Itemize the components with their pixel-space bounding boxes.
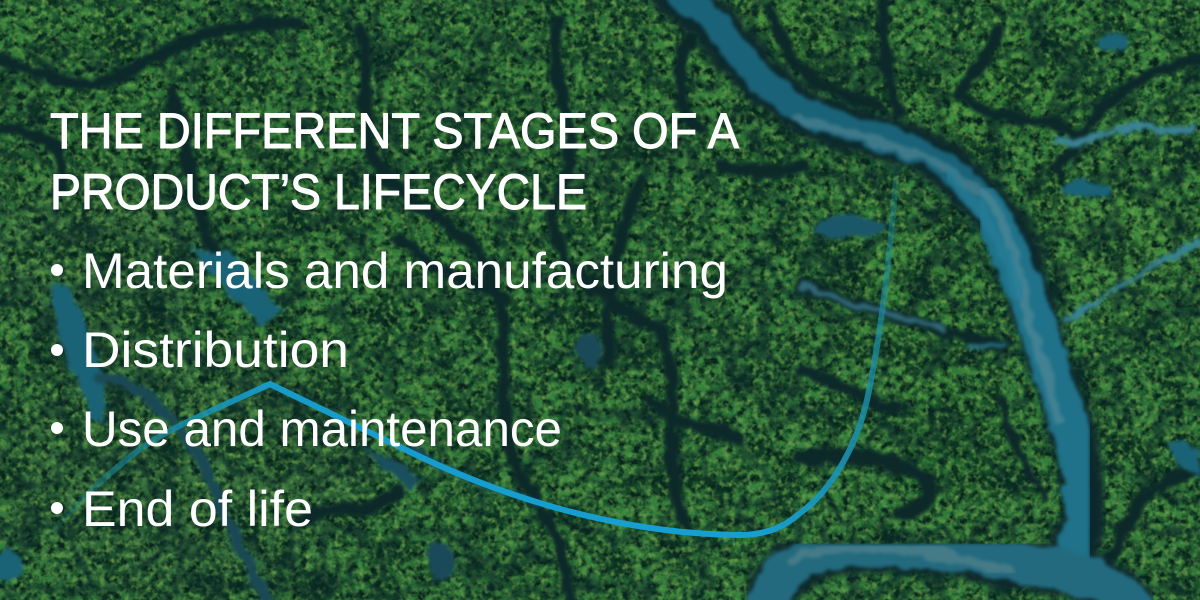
bullet: end of life: End of life [82, 481, 313, 537]
bullet: materials: Materials and manufacturing [82, 243, 728, 299]
river banks [670, 0, 1085, 550]
heading: PRODUCT’S LIFECYCLE [50, 164, 587, 220]
heading [50, 103, 740, 220]
river highlights [800, 118, 1060, 420]
bullet list [51, 243, 728, 537]
heading: THE DIFFERENT STAGES OF A [50, 103, 740, 159]
river [670, 0, 1135, 600]
bullet: use: Use and maintenance [82, 401, 562, 457]
bullet: distribution: Distribution [82, 322, 349, 378]
lifecycle curve [45, 163, 897, 540]
river water [680, 0, 990, 210]
